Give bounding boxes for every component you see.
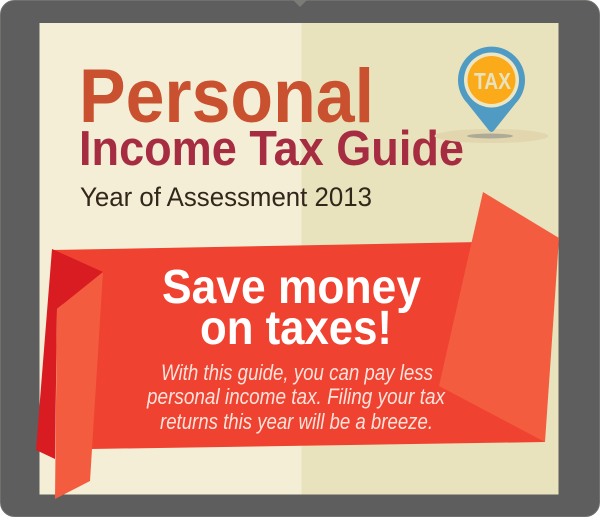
title: Personal: Personal (79, 54, 374, 139)
ribbon main body (52, 242, 545, 449)
banner description: returns this year will be a breeze. (160, 409, 433, 434)
banner heading: on taxes! (200, 302, 392, 355)
subtitle: year of assessment: Year of Assessment 2013 (80, 182, 372, 212)
ribbon left back fold (36, 249, 103, 459)
banner heading: Save money (162, 261, 421, 314)
icon: tax location pin: TAX (474, 68, 512, 94)
banner description: personal income tax. Filing your tax (146, 384, 446, 409)
title: Income Tax Guide: Income Tax Guide (79, 122, 464, 176)
ribbon left front fold (55, 272, 103, 499)
panel: book page (40, 23, 558, 494)
banner heading (162, 261, 421, 355)
banner: red ribbon (36, 192, 559, 499)
banner description (146, 360, 446, 434)
ribbon right fold (439, 192, 559, 442)
banner description: With this guide, you can pay less (161, 360, 433, 385)
icon: tax location pin (434, 47, 548, 143)
